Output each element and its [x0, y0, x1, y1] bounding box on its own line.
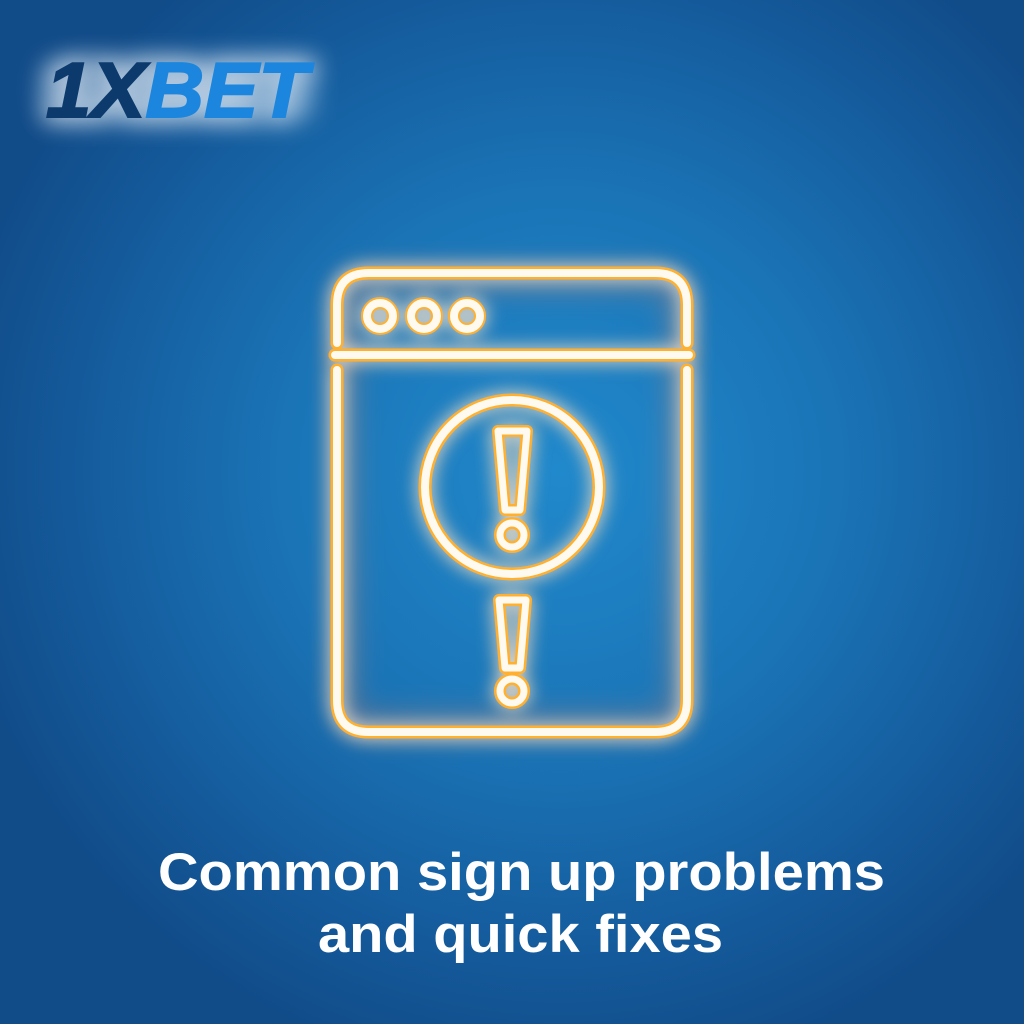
- lower exclamation mark: [499, 600, 526, 703]
- window top bar outline: [337, 273, 687, 343]
- logo: 1XBET: 1XBET: [46, 46, 315, 134]
- icon: neon browser window with warning: [335, 273, 689, 732]
- exclamation mark in circle: [498, 431, 527, 547]
- window inner haze: [345, 280, 679, 724]
- title: and quick fixes: [318, 905, 723, 964]
- title: Common sign up problems: [158, 843, 885, 902]
- warning circle: [425, 400, 599, 574]
- window dots: [367, 303, 480, 329]
- title: [158, 843, 885, 964]
- window divider: [335, 348, 689, 362]
- logo: 1XBET: 1XBET: [46, 46, 315, 134]
- window body outline: [337, 370, 687, 732]
